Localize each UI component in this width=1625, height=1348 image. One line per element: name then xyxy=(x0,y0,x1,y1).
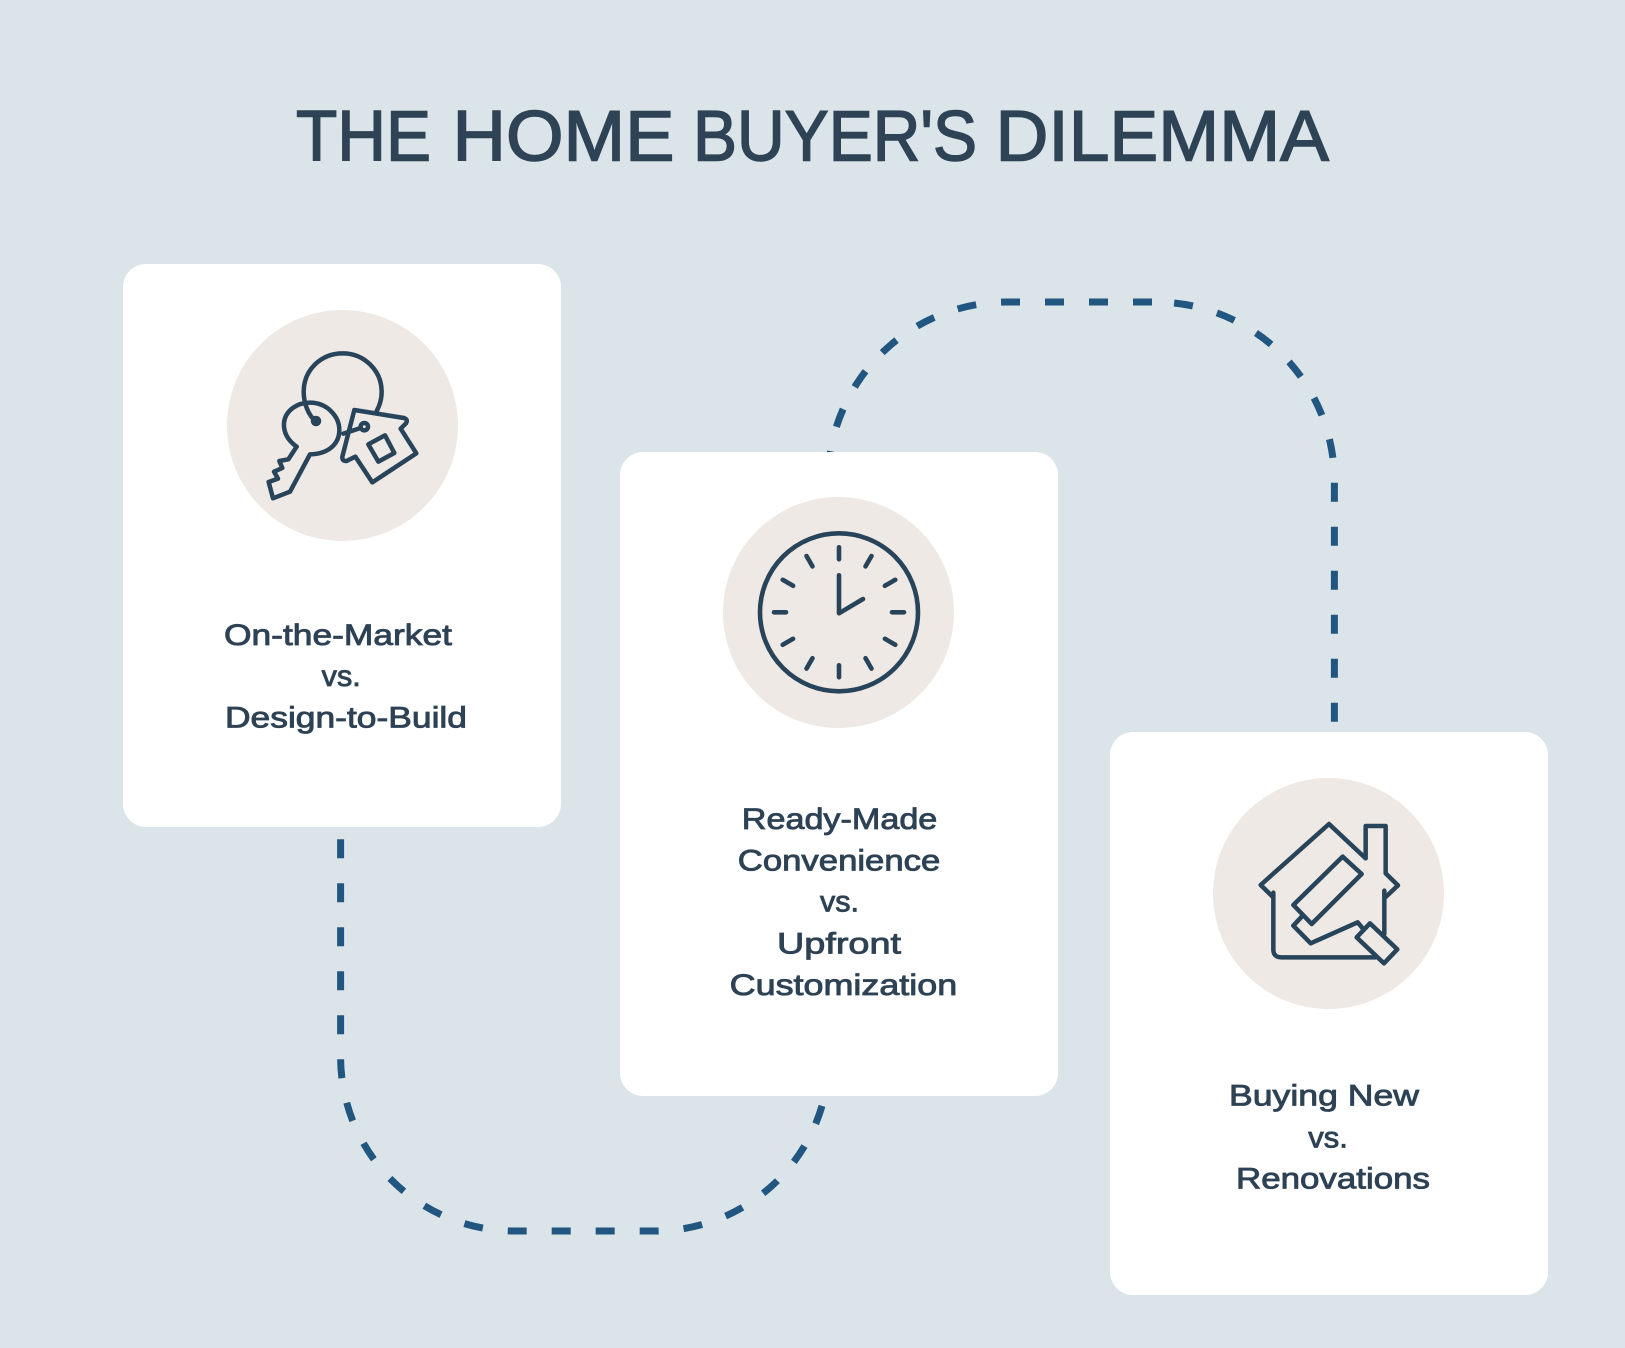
label: ready-made vs upfront customization xyxy=(730,803,957,1002)
dashed connector: card 3 to card 2 xyxy=(828,302,1334,722)
icon: clock xyxy=(723,497,954,728)
label: buying new vs renovations: vs. xyxy=(1308,1121,1348,1154)
title: BUYER'S xyxy=(693,98,977,177)
label: on-the-market vs design-to-build: Design-to-Build xyxy=(225,702,467,735)
icon: house keys xyxy=(227,310,458,541)
title: HOME xyxy=(452,98,674,177)
title: THE xyxy=(296,98,431,177)
label: buying new vs renovations: Buying New xyxy=(1229,1080,1420,1113)
dashed connector: card 1 to card 2 xyxy=(341,839,829,1231)
label: ready-made vs upfront customization: Customization xyxy=(730,969,957,1002)
label: ready-made vs upfront customization: Upfront xyxy=(777,927,901,960)
panel: buying new vs renovations xyxy=(1110,732,1548,1295)
label: on-the-market vs design-to-build: On-the-Market xyxy=(224,619,452,652)
panel: ready-made vs upfront customization xyxy=(620,452,1058,1096)
label: on-the-market vs design-to-build xyxy=(224,619,467,735)
label: ready-made vs upfront customization: Convenience xyxy=(738,845,940,878)
panel: on-the-market vs design-to-build xyxy=(123,264,561,827)
label: buying new vs renovations xyxy=(1229,1080,1430,1195)
label: ready-made vs upfront customization: vs. xyxy=(820,886,859,919)
label: ready-made vs upfront customization: Ready-Made xyxy=(742,803,937,836)
label: buying new vs renovations: Renovations xyxy=(1236,1162,1430,1195)
label: on-the-market vs design-to-build: vs. xyxy=(322,660,361,693)
icon: house with paint roller xyxy=(1213,778,1444,1009)
title: DILEMMA xyxy=(996,98,1330,177)
